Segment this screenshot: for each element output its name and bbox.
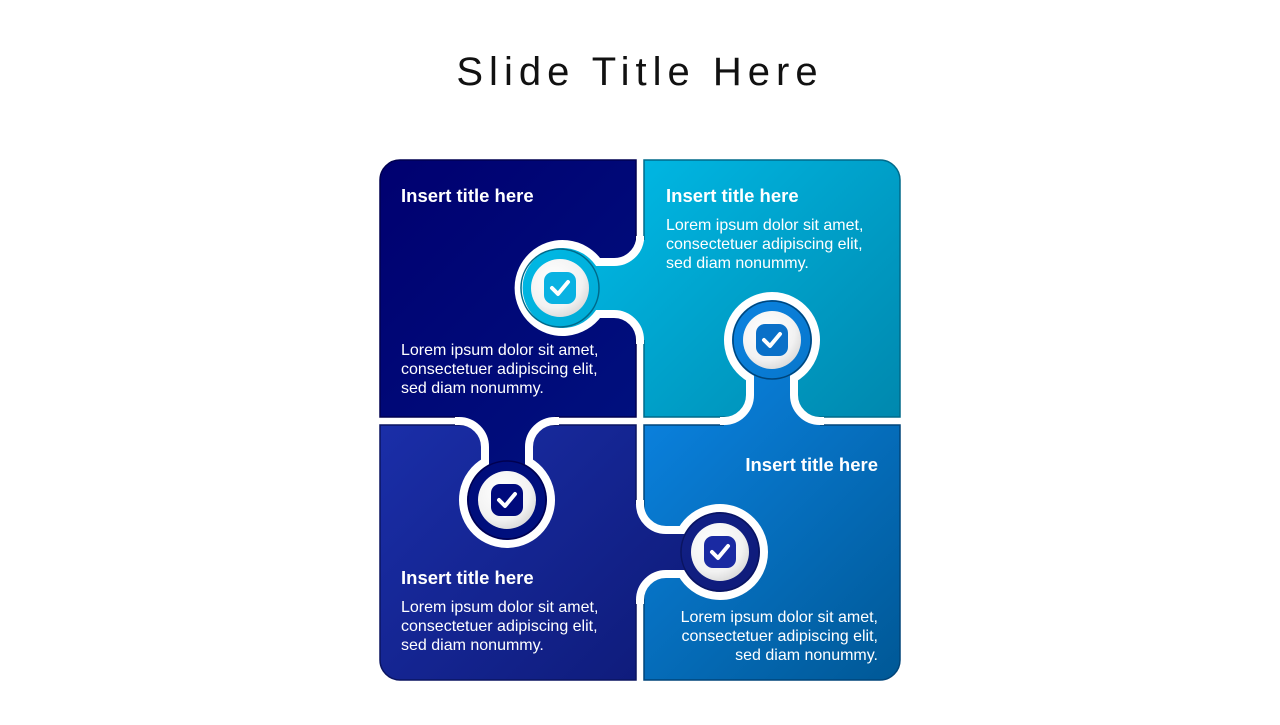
text block: bottom-left: consectetuer adipiscing elit,: [401, 618, 598, 635]
icon: check: [544, 272, 576, 304]
text block: top-left: [401, 185, 598, 397]
text block: top-left: Lorem ipsum dolor sit amet,: [401, 342, 598, 359]
panel: top-left piece: [380, 160, 636, 417]
text block: bottom-left: sed diam nonummy.: [401, 637, 544, 654]
tab: top-right knob: [519, 236, 650, 344]
tab: top-left knob: [455, 411, 559, 544]
panel: top-right piece: [644, 160, 900, 417]
tab: bottom-left knob: [630, 500, 764, 604]
icon: check: [491, 484, 523, 516]
text block: top-right: sed diam nonummy.: [666, 255, 809, 272]
text block: bottom-right: consectetuer adipiscing elit,: [681, 628, 878, 645]
text block: bottom-left: [401, 567, 598, 654]
icon: check: [756, 324, 788, 356]
text block: top-right: Insert title here: [666, 185, 799, 206]
text block: top-left: consectetuer adipiscing elit,: [401, 361, 598, 378]
text block: bottom-right: Lorem ipsum dolor sit amet,: [681, 609, 878, 626]
panel: bottom-left piece: [380, 425, 636, 680]
panel: bottom-right piece: [644, 425, 900, 680]
text block: bottom-right: Insert title here: [745, 454, 878, 475]
text block: top-left: Insert title here: [401, 185, 534, 206]
text block: bottom-left: Insert title here: [401, 567, 534, 588]
text block: top-right: consectetuer adipiscing elit,: [666, 236, 863, 253]
text block: bottom-left: Lorem ipsum dolor sit amet,: [401, 599, 598, 616]
tab: bottom-right knob: [720, 296, 824, 431]
icon: check: [704, 536, 736, 568]
title: Slide Title Here: [456, 50, 824, 94]
text block: top-right: Lorem ipsum dolor sit amet,: [666, 217, 863, 234]
text block: top-right: [666, 185, 863, 272]
text block: bottom-right: [681, 454, 878, 664]
text block: bottom-right: sed diam nonummy.: [735, 647, 878, 664]
text block: top-left: sed diam nonummy.: [401, 380, 544, 397]
